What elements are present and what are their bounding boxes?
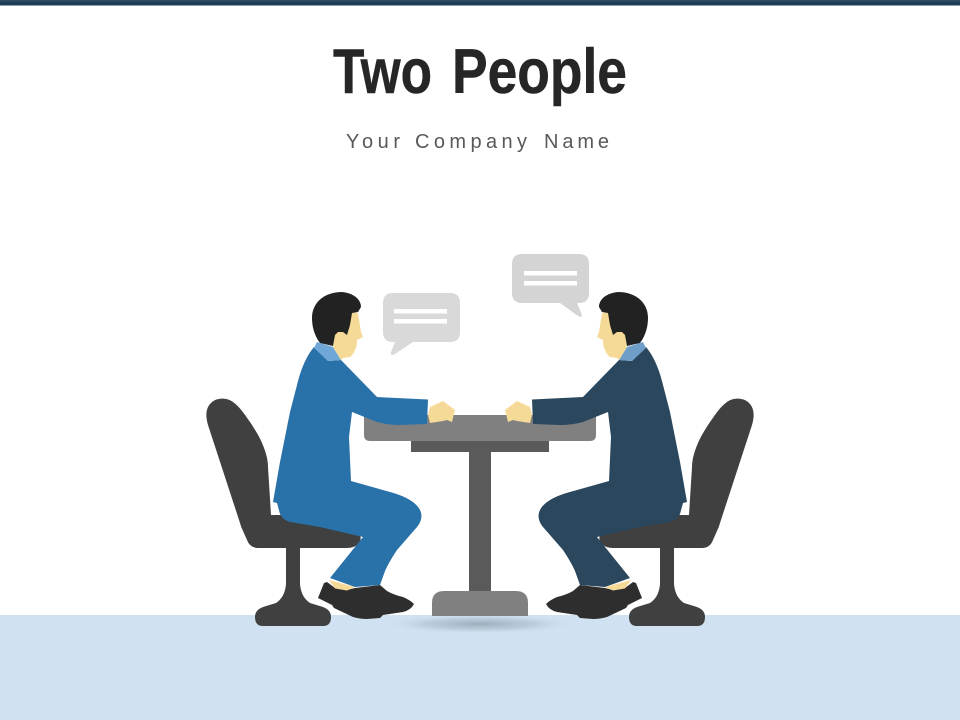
sock [329,580,355,590]
person right [505,292,687,619]
collar [314,342,341,361]
hand [505,401,532,423]
jacket and trousers [532,347,687,587]
jacket and trousers [273,347,428,587]
subtitle: Name [544,131,609,153]
speech bubble left [383,293,460,355]
table top [364,415,596,441]
subtitle: Your [346,131,400,153]
chair left [206,399,361,626]
table base [432,591,528,616]
top bar [0,0,960,6]
sock [605,580,631,590]
shoe [546,582,642,619]
hand [428,401,455,423]
floor [0,615,960,720]
speech bubble right [512,254,589,317]
title: People [452,37,627,107]
table [364,415,596,616]
table stem [469,450,491,593]
hair [312,292,361,346]
shoe [318,582,414,619]
neck and face [597,312,627,360]
table apron [411,440,549,452]
table shadow [382,614,578,634]
person left [273,292,455,619]
title: Two [333,37,432,107]
subtitle: Company [415,131,527,153]
hair [599,292,648,346]
chair right [599,399,754,626]
collar [619,342,646,361]
neck and face [333,312,363,360]
